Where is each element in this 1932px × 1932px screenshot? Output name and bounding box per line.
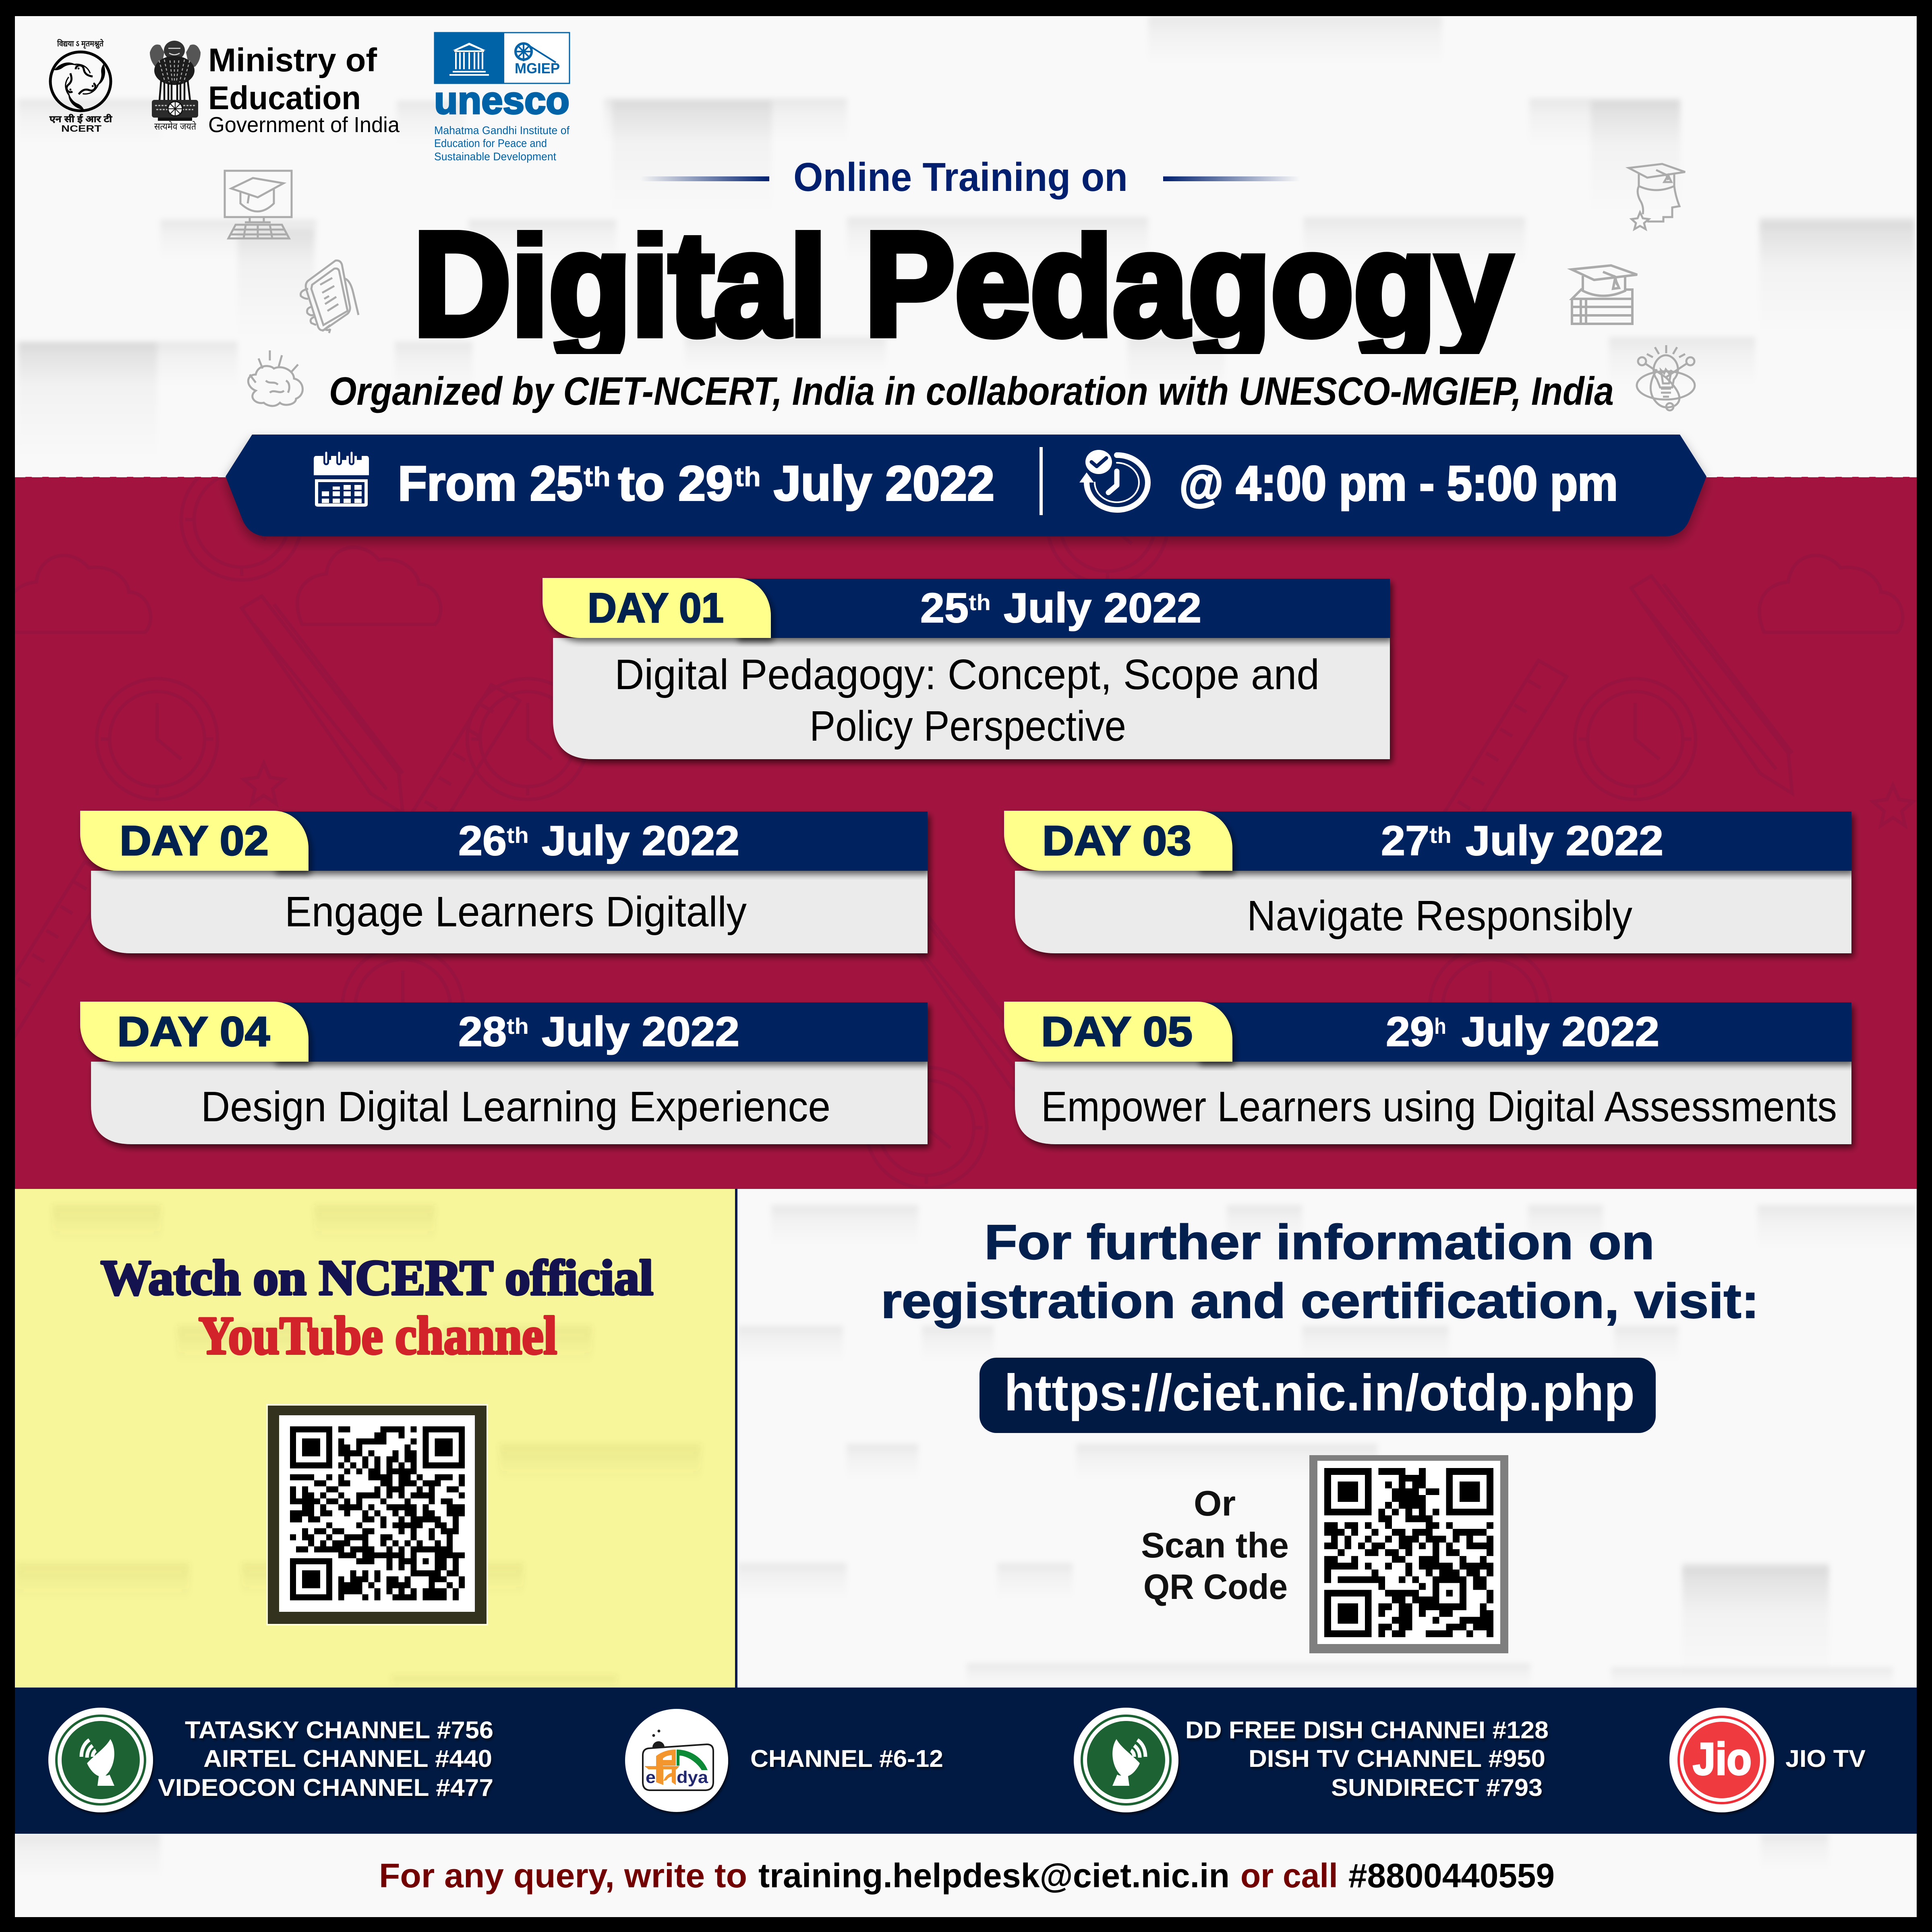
text: Tata Sky, Airtel, Videocon channels: AIRTEL CHANNEL #440 xyxy=(203,1745,492,1772)
logo: UNESCO MGIEP: Mahatma Gandhi Institute of xyxy=(434,124,569,137)
icon: monitor with graduation cap xyxy=(225,171,292,238)
panel: TV channels band xyxy=(15,1688,1917,1834)
logo: national emblem: सत्यमेव जयते xyxy=(154,121,197,132)
footer query line: For any query, write to xyxy=(379,1857,747,1895)
logo: NCERT: एन सी ई आर टी xyxy=(49,114,113,124)
QR code: YouTube xyxy=(266,1404,488,1626)
card: day 02 xyxy=(80,811,928,953)
card: day 02: 26 xyxy=(458,818,507,864)
icon: brain with rays xyxy=(248,350,302,406)
card: day 04: th xyxy=(507,1013,529,1039)
footer query line: training.helpdesk@ciet.nic.in xyxy=(758,1857,1230,1895)
text: date range: th xyxy=(584,462,611,492)
date and time ribbon xyxy=(226,435,1706,536)
card: day 01: Digital Pedagogy: Concept, Scope and xyxy=(615,651,1319,698)
text: date range: From 25 xyxy=(398,456,583,511)
text: Ministry of Education: Education xyxy=(208,80,361,116)
card: day 02: DAY 02 xyxy=(120,818,269,864)
card: day 01 xyxy=(543,578,1390,759)
card: day 05: 29 xyxy=(1386,1008,1434,1055)
card: day 01: th xyxy=(969,590,991,615)
text: date range: July 2022 xyxy=(774,456,994,511)
URL button: https://ciet.nic.in/otdp.php xyxy=(1004,1364,1635,1422)
text: time: @ 4:00 pm - 5:00 pm xyxy=(1179,456,1618,511)
card: day 01: DAY 01 xyxy=(588,585,724,632)
icon: Jio badge: Jio xyxy=(1693,1734,1752,1784)
text: or scan the QR code: Or xyxy=(1194,1483,1236,1523)
text: e-Vidya channel: CHANNEL #6-12 xyxy=(750,1745,943,1772)
heading: YouTube channel: YouTube channel xyxy=(199,1306,557,1365)
text: DD Free Dish, Dish TV, Sundirect channels: DISH TV CHANNEL #950 xyxy=(1249,1745,1545,1772)
card: day 05: July 2022 xyxy=(1462,1008,1659,1055)
card: day 01: 25 xyxy=(920,585,969,632)
heading: further information line 2: registration and certification, visit: xyxy=(881,1274,1759,1328)
card: day 03: Navigate Responsibly xyxy=(1247,892,1632,940)
icon: head with graduation cap and star xyxy=(1629,164,1685,229)
card: day 03: 27 xyxy=(1381,818,1429,864)
text: date range: th xyxy=(735,462,761,492)
icon: books with graduation cap xyxy=(1572,265,1637,324)
text: DD Free Dish, Dish TV, Sundirect channels: DD FREE DISH CHANNEI #128 xyxy=(1185,1717,1549,1744)
text: Tata Sky, Airtel, Videocon channels: VIDEOCON CHANNEL #477 xyxy=(158,1774,493,1801)
QR code: registration xyxy=(1309,1455,1508,1653)
subtitle: organizers: Organized by CIET-NCERT, India in collaboration with UNESCO-MGIEP, India xyxy=(329,369,1614,413)
heading: Online Training on xyxy=(640,155,1300,200)
logo: NCERT: NCERT xyxy=(61,123,101,134)
crimson programme section xyxy=(0,459,1917,1189)
text: Ministry of Education: Government of India xyxy=(208,113,400,137)
card: day 03: July 2022 xyxy=(1466,818,1663,864)
card: day 02: July 2022 xyxy=(542,818,739,864)
heading: watch on NCERT: Watch on NCERT official xyxy=(101,1250,653,1305)
icon: satellite dish badge 1 xyxy=(48,1708,153,1812)
logo: NCERT: विद्यया ऽ मृतमश्नुते xyxy=(57,39,104,49)
icon: e-Vidya badge: dya xyxy=(677,1768,708,1787)
card: day 03: th xyxy=(1429,822,1452,848)
icon: Jio badge xyxy=(1669,1708,1774,1812)
card: day 05 xyxy=(1004,1002,1851,1144)
card: day 02: Engage Learners Digitally xyxy=(285,888,747,936)
text: Ministry of Education xyxy=(208,42,400,137)
card: day 01: Policy Perspective xyxy=(810,702,1126,750)
text: Tata Sky, Airtel, Videocon channels xyxy=(158,1717,493,1801)
text: date range: to 29 xyxy=(618,456,733,511)
logo: UNESCO MGIEP: Education for Peace and xyxy=(434,137,547,149)
panel: registration information xyxy=(881,1215,1759,1653)
icon: clock with check xyxy=(1079,450,1148,510)
text: date range xyxy=(398,456,994,511)
logo: national emblem xyxy=(150,41,201,132)
card: day 03 xyxy=(1004,811,1851,953)
title: Digital Pedagogy: Digital Pedagogy xyxy=(413,202,1512,367)
card: day 05: h xyxy=(1434,1013,1446,1039)
icon: e-Vidya badge xyxy=(625,1709,728,1812)
card: day 02: th xyxy=(507,822,529,848)
panel: YouTube on yellow xyxy=(15,1189,737,1688)
text: DD Free Dish, Dish TV, Sundirect channels: SUNDIRECT #793 xyxy=(1331,1774,1543,1801)
text: or scan the QR code: Scan the xyxy=(1141,1525,1289,1565)
logo: UNESCO MGIEP: unesco xyxy=(434,79,569,122)
card: day 04 xyxy=(80,1002,928,1144)
footer query line: #8800440559 xyxy=(1348,1857,1555,1895)
logo: UNESCO MGIEP: Sustainable Development xyxy=(434,150,556,163)
card: day 05: DAY 05 xyxy=(1041,1008,1193,1055)
text: Ministry of Education: Ministry of xyxy=(208,42,377,79)
icon: light bulb and atom xyxy=(1637,345,1695,410)
logo: NCERT xyxy=(49,39,113,134)
logo: UNESCO MGIEP: MGIEP xyxy=(515,60,560,77)
card: day 04: July 2022 xyxy=(542,1008,739,1055)
text: DD Free Dish, Dish TV, Sundirect channels xyxy=(1185,1717,1549,1801)
heading: Online Training on: Online Training on xyxy=(793,155,1128,200)
footer query line: or call xyxy=(1240,1857,1338,1895)
card: day 01: July 2022 xyxy=(1004,585,1201,632)
icon: e-Vidya badge: e xyxy=(646,1768,656,1787)
card: day 04: Design Digital Learning Experience xyxy=(201,1083,830,1131)
card: day 05: Empower Learners using Digital Assessments xyxy=(1041,1083,1837,1131)
card: day 03: DAY 03 xyxy=(1042,818,1191,864)
text: or scan the QR code: QR Code xyxy=(1143,1567,1288,1607)
logo: UNESCO MGIEP xyxy=(434,32,569,163)
card: day 04: DAY 04 xyxy=(117,1008,270,1055)
icon: calendar xyxy=(314,453,369,507)
card: day 04: 28 xyxy=(458,1008,507,1055)
icon: satellite dish badge 2 xyxy=(1074,1708,1178,1812)
text: Tata Sky, Airtel, Videocon channels: TATASKY CHANNEL #756 xyxy=(185,1717,493,1744)
icon: phone in hand xyxy=(300,261,358,333)
text: or scan the QR code xyxy=(1141,1483,1289,1607)
text: Jio TV: JIO TV xyxy=(1785,1745,1866,1772)
heading: further information line 1: For further information on xyxy=(984,1215,1655,1269)
footer query line xyxy=(379,1857,1555,1895)
